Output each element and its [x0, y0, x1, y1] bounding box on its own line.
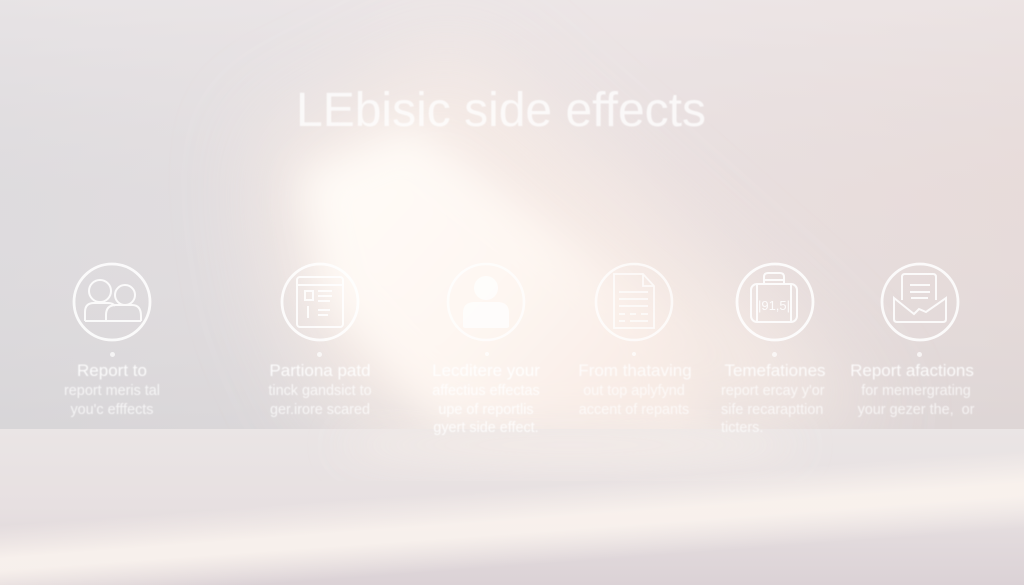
column 1: report to — [64, 262, 160, 418]
column 4: from thataving — [578, 262, 692, 418]
icon: briefcase — [736, 262, 814, 342]
heading: Temefationes — [724, 361, 826, 380]
bullet — [632, 352, 636, 356]
description — [432, 383, 540, 436]
column 5: temefationes — [721, 262, 826, 436]
bullet — [317, 352, 322, 357]
bullet — [772, 352, 777, 357]
description — [721, 383, 825, 436]
heading: Report afactions — [850, 361, 974, 380]
column 2: partiona patd — [268, 262, 372, 418]
column 6: report afactions — [850, 262, 974, 418]
description: gyert side effect. — [433, 420, 539, 436]
title: LEbisic side effects — [296, 84, 706, 137]
description: for memergrating — [861, 383, 971, 399]
description: upe of reportlis — [438, 402, 534, 418]
icon: person — [447, 263, 525, 341]
description: report meris tal — [64, 383, 160, 399]
description: ticters. — [721, 420, 763, 436]
description: affectius effectas — [432, 383, 540, 399]
heading: Lecditere your — [432, 361, 540, 380]
icon: open envelope — [880, 262, 960, 342]
description: ger.irore scared — [270, 402, 370, 418]
description — [64, 383, 160, 418]
heading: From thataving — [578, 361, 692, 380]
description: out top aplyfynd — [583, 383, 685, 399]
icon: two people — [72, 262, 152, 342]
heading: Partiona patd — [269, 361, 371, 380]
icon: text document — [594, 262, 674, 342]
bullet — [110, 352, 115, 357]
column 3: lecditere your — [432, 263, 540, 436]
description — [858, 383, 974, 418]
description — [268, 383, 372, 418]
heading: Report to — [77, 361, 147, 380]
description — [579, 383, 689, 418]
icon: document panel — [280, 262, 360, 342]
description: you'c efffects — [70, 402, 154, 418]
icon: briefcase: |91,5| — [758, 298, 790, 313]
bullet — [485, 352, 489, 356]
description: tinck gandsict to — [268, 383, 372, 399]
description: report ercay y'or — [721, 383, 825, 399]
description: accent of repants — [579, 402, 689, 418]
description: your gezer the, or — [858, 402, 974, 418]
description: sife recarapttion — [721, 402, 823, 418]
bullet — [917, 352, 922, 357]
